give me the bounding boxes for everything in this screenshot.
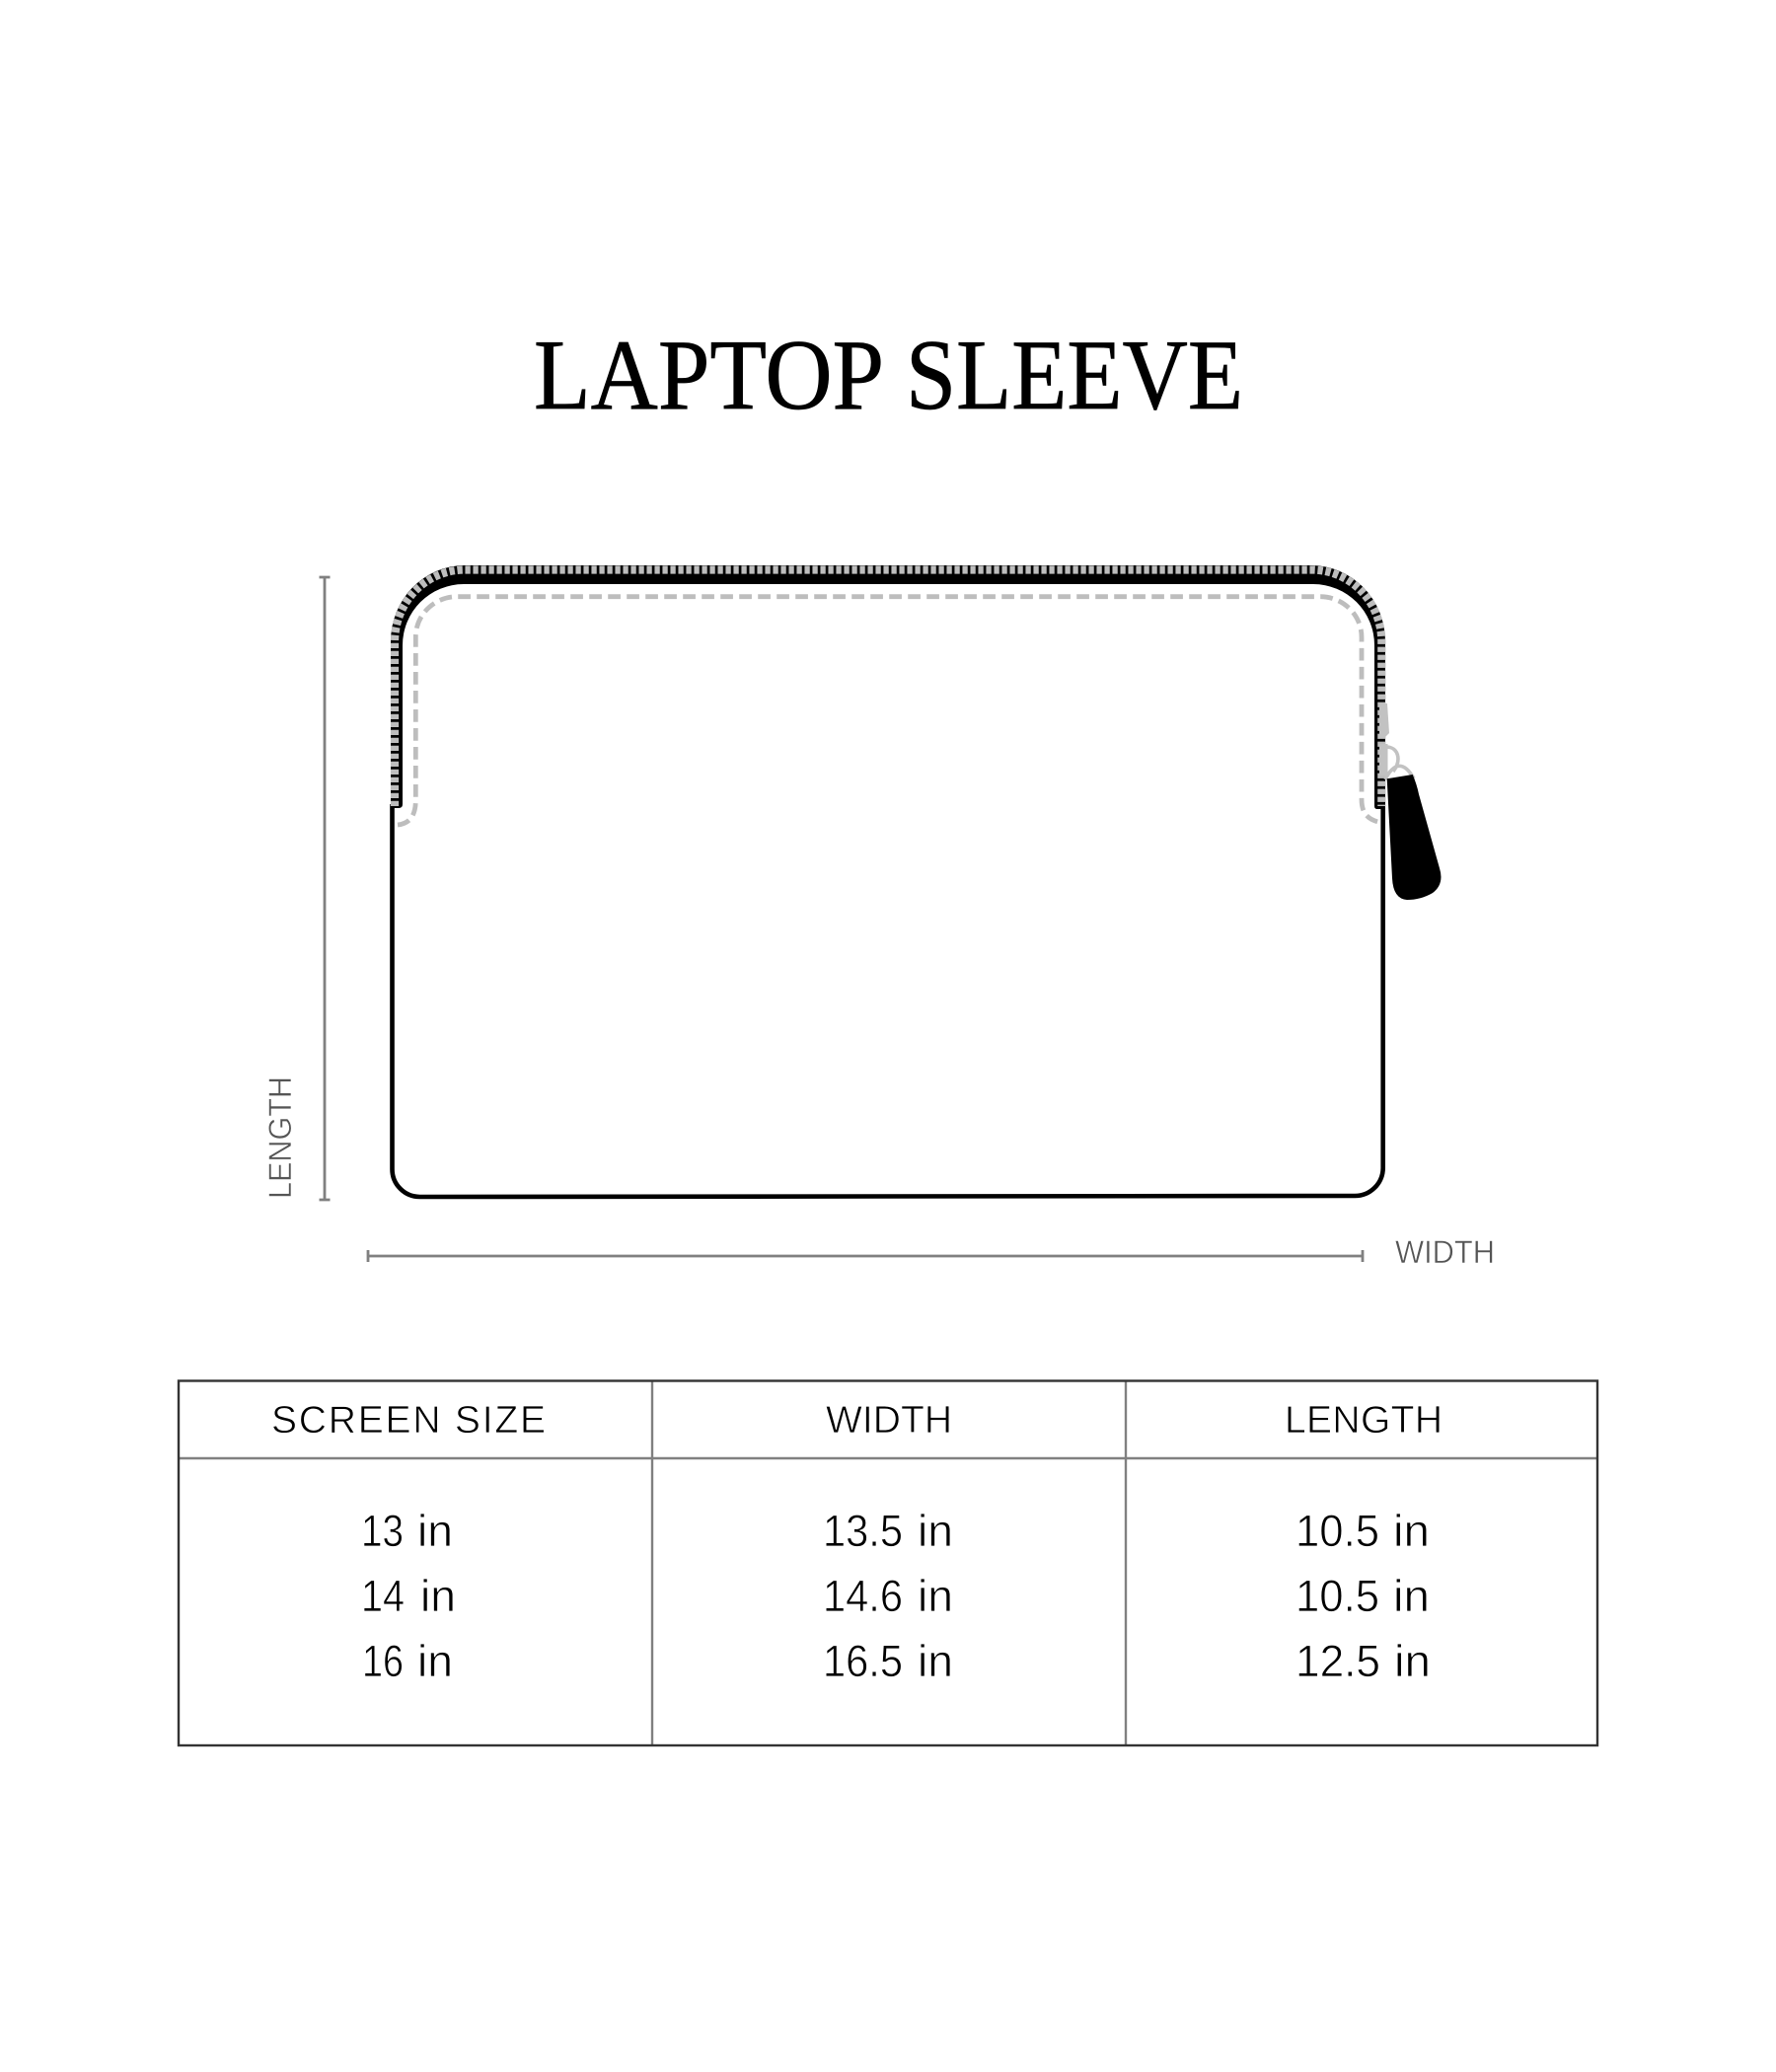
column: screen size: in (417, 1636, 453, 1686)
column: width (823, 1399, 953, 1686)
column: screen size: in (420, 1571, 456, 1621)
zipper slider and rings (1379, 703, 1414, 779)
dashed stitching (398, 597, 1378, 825)
title: SLEEVE (906, 320, 1243, 431)
zipper pull (1387, 775, 1441, 900)
dimension: length: LENGTH (262, 1076, 298, 1199)
column: length: in (1393, 1506, 1430, 1556)
zipper teeth (395, 569, 1381, 806)
sleeve body outline (393, 804, 1383, 1197)
column: length: in (1393, 1571, 1430, 1621)
dimension: width (368, 1234, 1495, 1270)
column: screen size: 13 (361, 1506, 404, 1556)
column: screen size: SCREEN SIZE (271, 1399, 546, 1442)
dimension: length (262, 577, 330, 1200)
dimension: width: WIDTH (1395, 1234, 1495, 1270)
column: length: LENGTH (1285, 1399, 1443, 1442)
column: width: 13.5 (823, 1506, 903, 1556)
column: length: 10.5 (1295, 1571, 1379, 1621)
column: width: in (918, 1636, 953, 1686)
column: width: 14.6 (823, 1571, 903, 1621)
column: length: 12.5 (1295, 1636, 1380, 1686)
column: screen size: 14 (361, 1571, 405, 1621)
column: width: in (918, 1506, 953, 1556)
table grid (179, 1380, 1597, 1745)
column: width: 16.5 (823, 1636, 903, 1686)
column: screen size: 16 (362, 1636, 404, 1686)
column: length: in (1394, 1636, 1431, 1686)
column: width: in (918, 1571, 953, 1621)
size table (179, 1380, 1597, 1745)
column: screen size (271, 1399, 546, 1686)
column: length (1285, 1399, 1443, 1686)
column: screen size: in (417, 1506, 453, 1556)
diagram: laptop sleeve (391, 565, 1441, 1197)
zipper tape (391, 565, 1385, 809)
title (534, 320, 1243, 431)
title: LAPTOP (534, 320, 884, 431)
column: width: WIDTH (826, 1399, 952, 1442)
column: length: 10.5 (1295, 1506, 1379, 1556)
